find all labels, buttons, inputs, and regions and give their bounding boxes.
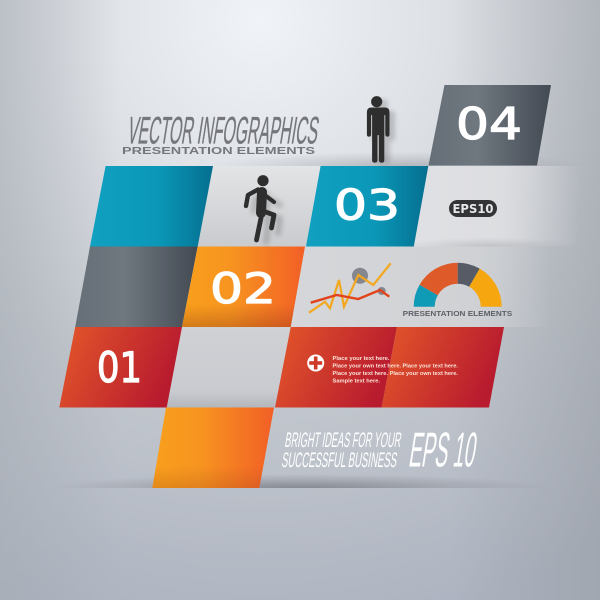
panel: blue tile bbox=[90, 166, 213, 246]
chart caption: PRESENTATION ELEMENTS bbox=[403, 311, 513, 318]
line chart bbox=[309, 263, 391, 313]
panel: tile 02 bbox=[182, 246, 305, 327]
text: BRIGHT IDEAS FOR YOUR bbox=[284, 429, 403, 452]
icon: plus bbox=[307, 354, 324, 372]
tagline bbox=[280, 429, 403, 472]
text: EPS 10 bbox=[406, 423, 481, 477]
icon: standing person bbox=[367, 96, 395, 163]
text block bbox=[332, 356, 458, 384]
panel: tile 04 bbox=[428, 85, 551, 166]
icon: walking person bbox=[246, 175, 280, 242]
panel: light background cells bbox=[50, 152, 590, 502]
subtitle: PRESENTATION ELEMENTS bbox=[122, 145, 315, 157]
panel: tile 03 bbox=[306, 166, 428, 246]
number 04: 04 bbox=[456, 99, 522, 150]
panel: grey tile bbox=[75, 246, 198, 327]
panel: bottom orange tile bbox=[152, 408, 274, 488]
text block: Sample text here. bbox=[332, 378, 380, 384]
text block: Place your text here. Place your own text here. bbox=[332, 371, 458, 377]
number 01: 01 bbox=[97, 343, 142, 392]
panel: red text tile bbox=[275, 327, 504, 408]
number 02: 02 bbox=[210, 264, 276, 313]
gauge chart bbox=[414, 263, 502, 307]
text: VECTOR INFOGRAPHICS bbox=[125, 110, 322, 152]
text block: Place your text here. bbox=[332, 356, 390, 362]
text block: Place your own text here. Place your text here. bbox=[332, 364, 458, 370]
number 03: 03 bbox=[334, 180, 400, 230]
panel: tile 01 bbox=[59, 327, 182, 408]
badge: EPS10: EPS10 bbox=[452, 202, 494, 216]
text: SUCCESSFUL BUSINESS bbox=[280, 449, 399, 472]
